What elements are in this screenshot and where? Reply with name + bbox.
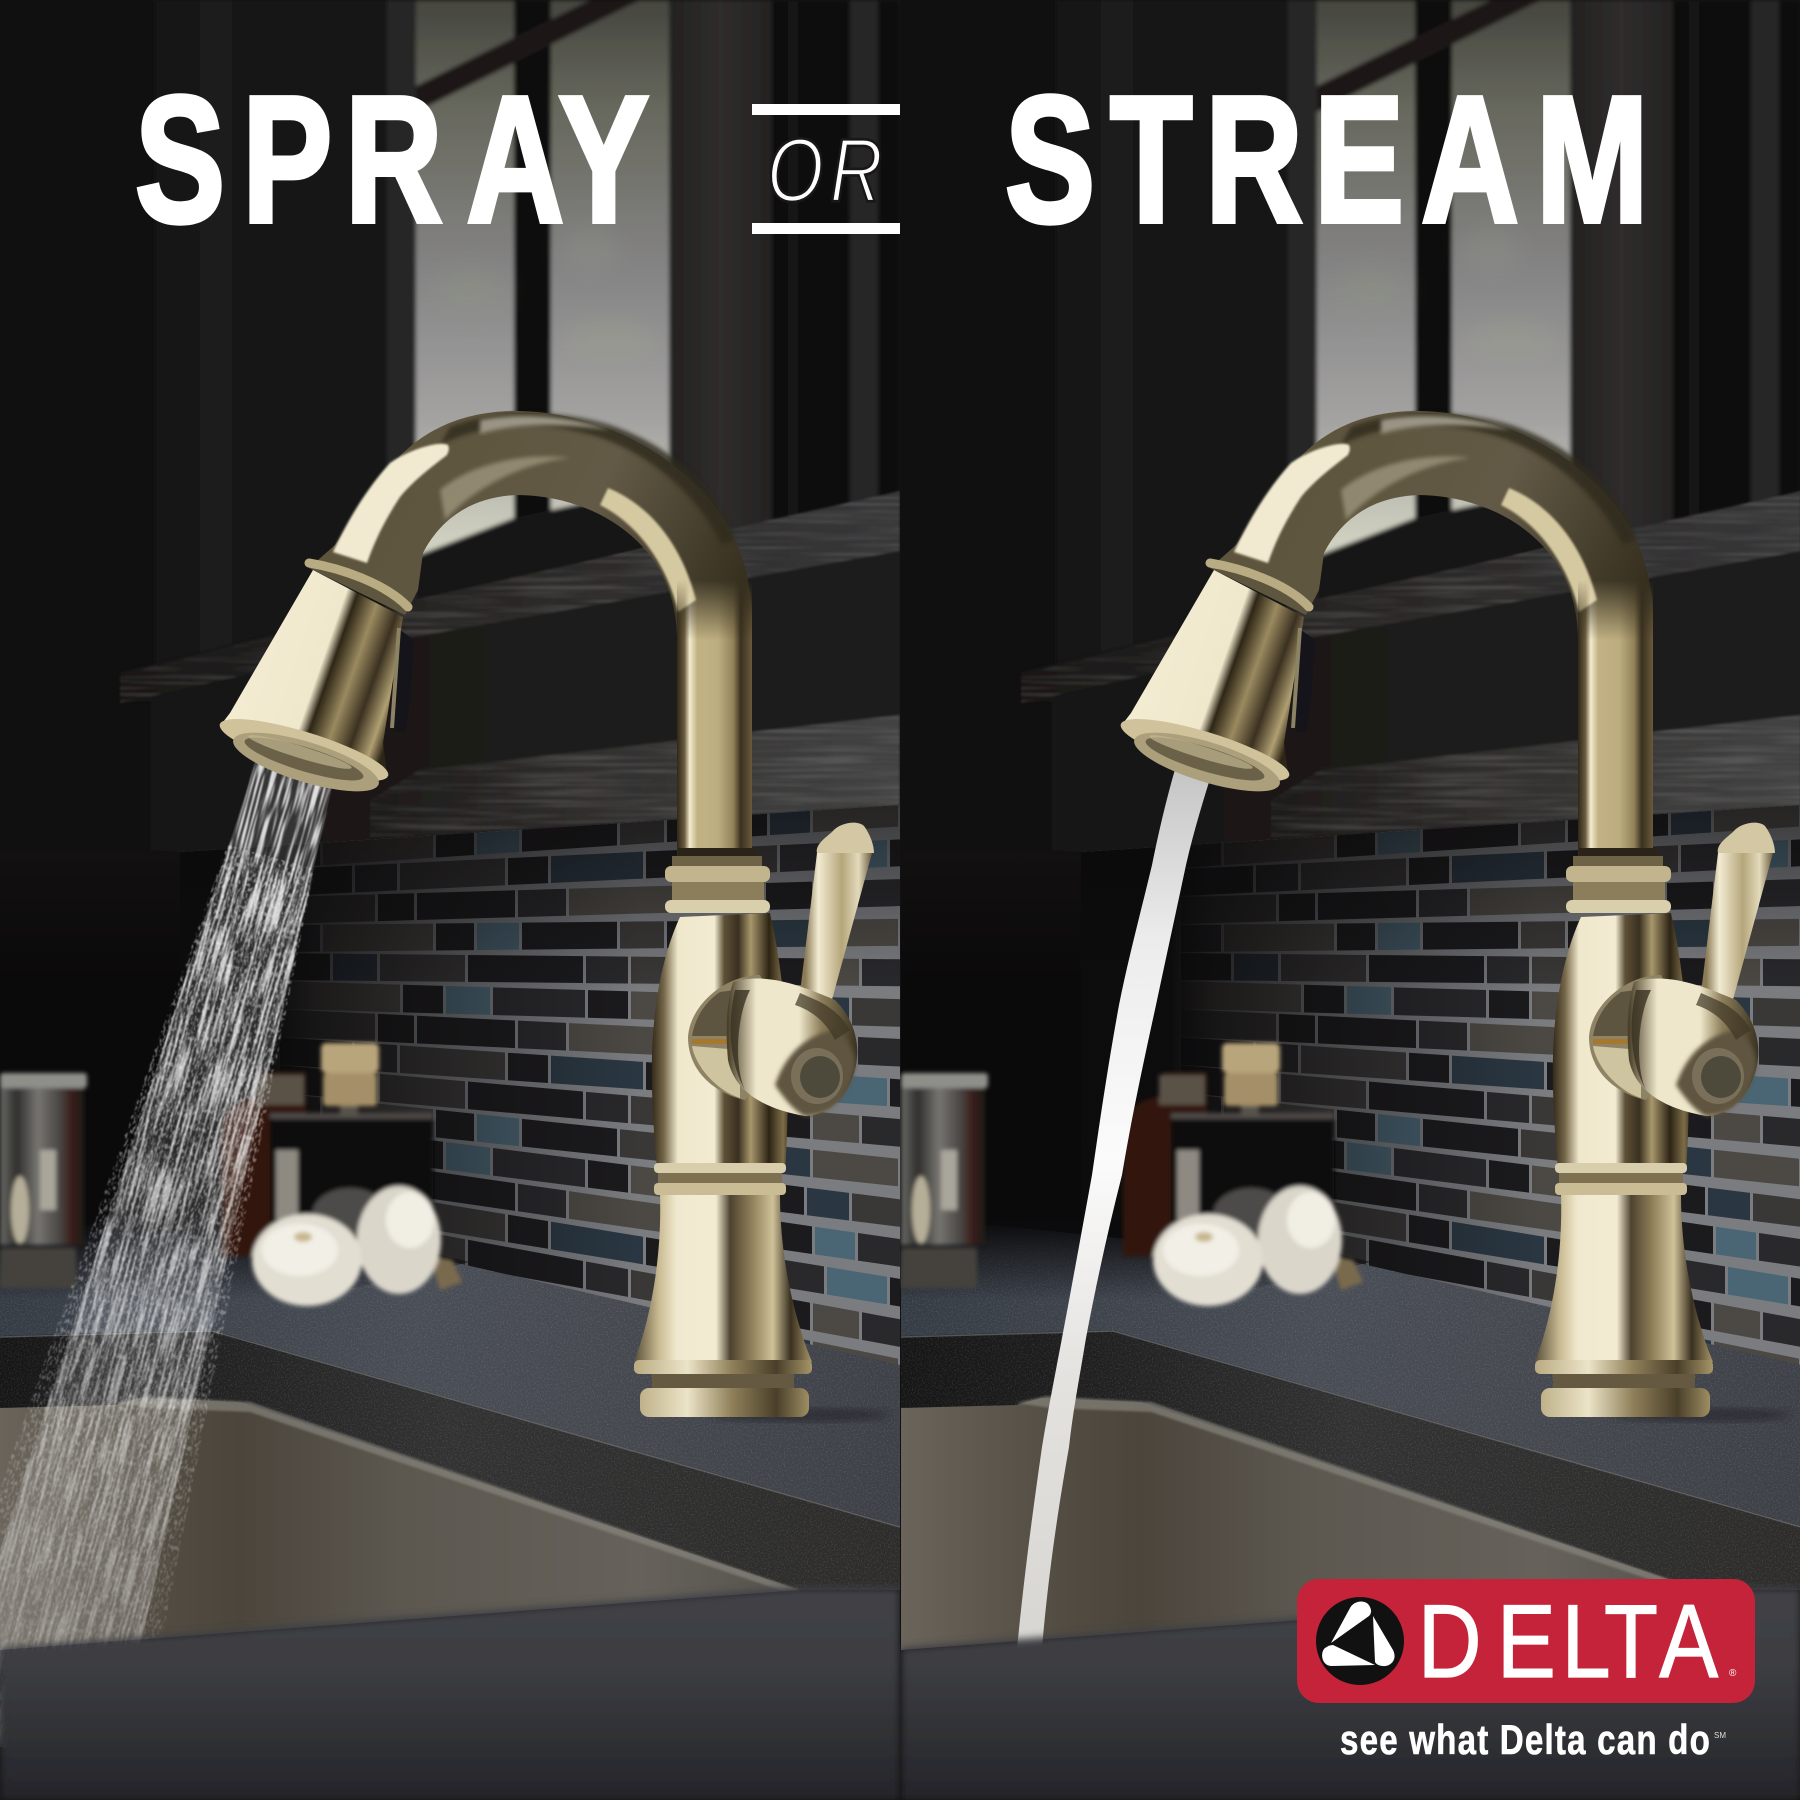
kitchen scene background [0, 0, 931, 1800]
faucet and front counter [901, 411, 1800, 1800]
solid stream of water [1016, 766, 1214, 1660]
kitchen scene background [901, 0, 1800, 1800]
panel: stream side [900, 0, 1800, 1800]
OR divider badge [752, 104, 900, 234]
OR divider badge: OR [767, 121, 889, 221]
spray of water [0, 741, 406, 1784]
title: STREAM: STREAM [1005, 59, 1648, 260]
title: SPRAY: SPRAY [135, 59, 649, 260]
faucet and front counter [0, 411, 900, 1800]
logo: DELTA badge: ® [1729, 1668, 1737, 1679]
panel: spray side [0, 0, 900, 1800]
logo: DELTA badge [1297, 1579, 1755, 1703]
tagline: SM [1714, 1731, 1726, 1740]
tagline: see what Delta can do [1340, 1716, 1711, 1763]
logo: DELTA badge: DELTA [1418, 1584, 1719, 1700]
